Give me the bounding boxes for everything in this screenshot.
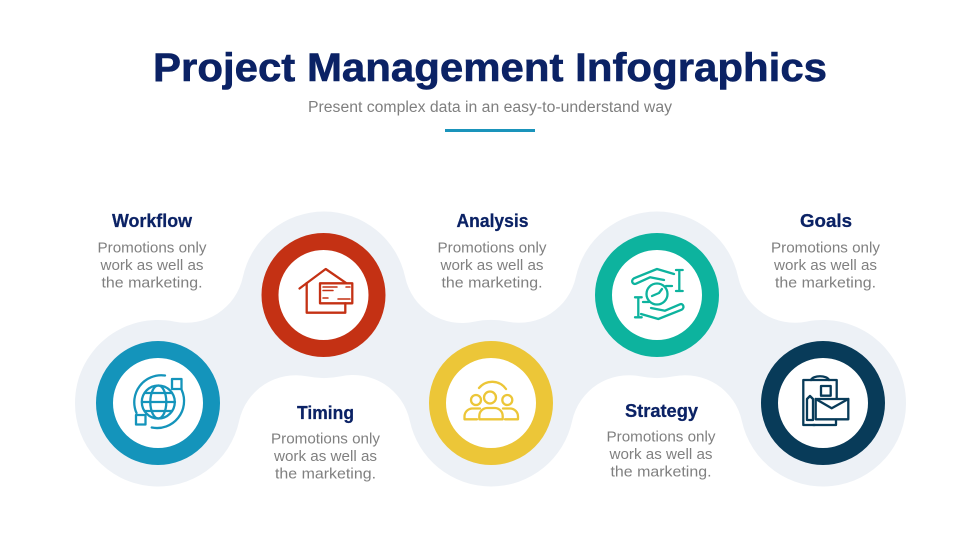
step: Strategy text bbox=[606, 401, 716, 480]
step: Workflow text: work as well as bbox=[99, 257, 204, 274]
icon: globe bbox=[134, 375, 184, 428]
teal ring with hands and clock icon bbox=[604, 242, 710, 348]
step: Analysis text: Analysis bbox=[456, 211, 528, 231]
step: Timing text: Timing bbox=[297, 403, 354, 423]
blue ring with globe icon bbox=[104, 350, 212, 456]
step: Goals text: Goals bbox=[800, 211, 852, 231]
navy ring with clipboard and envelope icon bbox=[770, 350, 876, 456]
step: Timing text bbox=[271, 403, 380, 482]
yellow ring with team icon bbox=[438, 350, 544, 456]
step: Goals text: Promotions only bbox=[771, 240, 880, 256]
step: Workflow text: Workflow bbox=[112, 211, 193, 231]
step: Workflow text bbox=[98, 211, 207, 292]
title accent bar bbox=[445, 129, 535, 132]
step: Goals text bbox=[771, 211, 880, 292]
icon: team bbox=[464, 382, 518, 419]
step: Analysis text: the marketing. bbox=[442, 274, 542, 292]
step: Strategy text: Promotions only bbox=[606, 428, 716, 446]
step: Goals text: the marketing. bbox=[775, 274, 876, 292]
step: Goals text: work as well as bbox=[773, 257, 877, 274]
red ring with house and card icon bbox=[270, 242, 377, 348]
step: Timing text: work as well as bbox=[273, 448, 377, 465]
step: Strategy text: work as well as bbox=[608, 446, 712, 463]
step: Analysis text bbox=[438, 211, 547, 292]
step: Workflow text: Promotions only bbox=[98, 240, 207, 256]
step: Strategy text: Strategy bbox=[625, 401, 698, 421]
title: Project Management Infographics bbox=[153, 46, 827, 90]
step: Timing text: the marketing. bbox=[275, 466, 376, 482]
step: Analysis text: Promotions only bbox=[438, 240, 547, 256]
connecting background band bbox=[75, 211, 906, 487]
subtitle: Present complex data in an easy-to-understand way bbox=[308, 99, 672, 116]
step: Analysis text: work as well as bbox=[439, 257, 544, 274]
icon: house with card bbox=[300, 269, 352, 313]
step: Timing text: Promotions only bbox=[271, 430, 380, 448]
step: Workflow text: the marketing. bbox=[102, 274, 202, 292]
step: Strategy text: the marketing. bbox=[610, 464, 712, 480]
icon: clipboard and envelope bbox=[803, 376, 848, 425]
icon: hands holding clock bbox=[632, 269, 683, 319]
